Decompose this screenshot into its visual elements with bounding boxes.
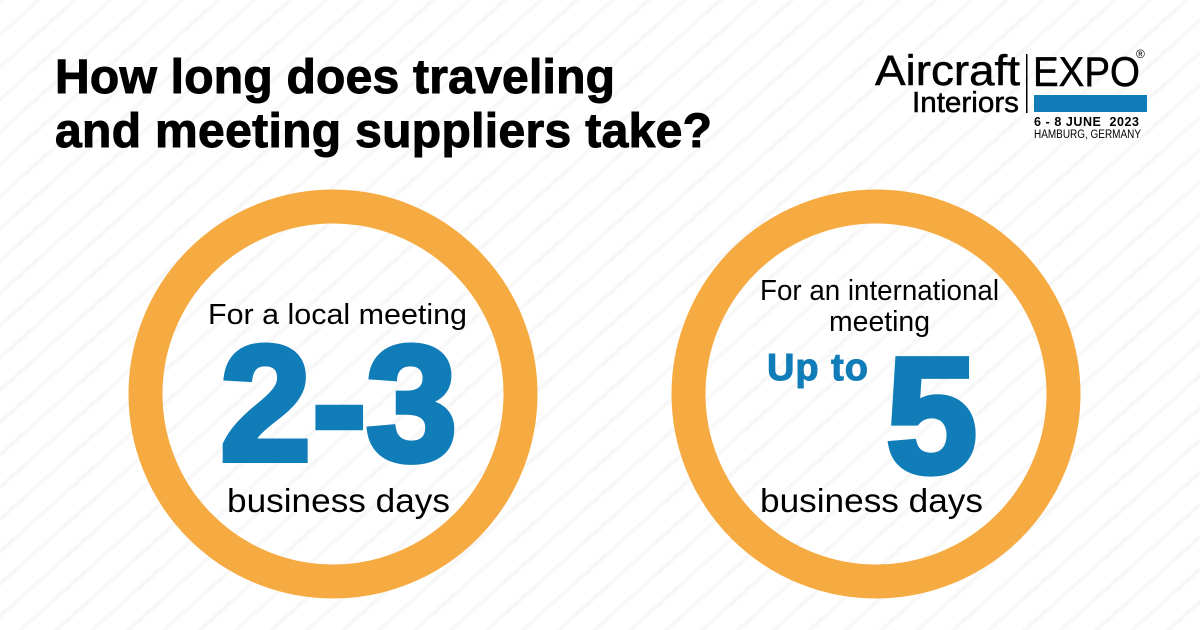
panel: international meeting ring <box>688 206 1064 582</box>
logo blue bar <box>1034 95 1147 112</box>
international meeting label <box>760 275 999 338</box>
logo EXPO: ® <box>1136 47 1145 61</box>
unit: business days <box>760 482 983 519</box>
unit: business days <box>227 482 450 519</box>
value 5: 5 <box>886 324 977 507</box>
logo date and place: 6 - 8 JUNE 2023 <box>1034 115 1139 129</box>
logo date and place <box>1034 115 1141 141</box>
title <box>55 51 712 158</box>
logo EXPO: EXPO <box>1033 48 1140 95</box>
logo wordmark left <box>875 47 1020 119</box>
international meeting label: For an international <box>760 275 999 307</box>
logo wordmark left: Interiors <box>912 87 1019 119</box>
value 2-3: 2-3 <box>220 312 457 495</box>
up to label: Up to <box>767 347 868 389</box>
local meeting label: For a local meeting <box>208 299 467 331</box>
panel: local meeting ring <box>146 206 520 582</box>
title: How long does traveling <box>55 51 615 104</box>
logo: Aircraft Interiors Expo <box>875 47 1147 141</box>
title: and meeting suppliers take? <box>55 105 712 158</box>
logo wordmark left: Aircraft <box>875 47 1020 95</box>
international meeting label: meeting <box>829 306 930 338</box>
logo date and place: HAMBURG, GERMANY <box>1034 129 1141 141</box>
